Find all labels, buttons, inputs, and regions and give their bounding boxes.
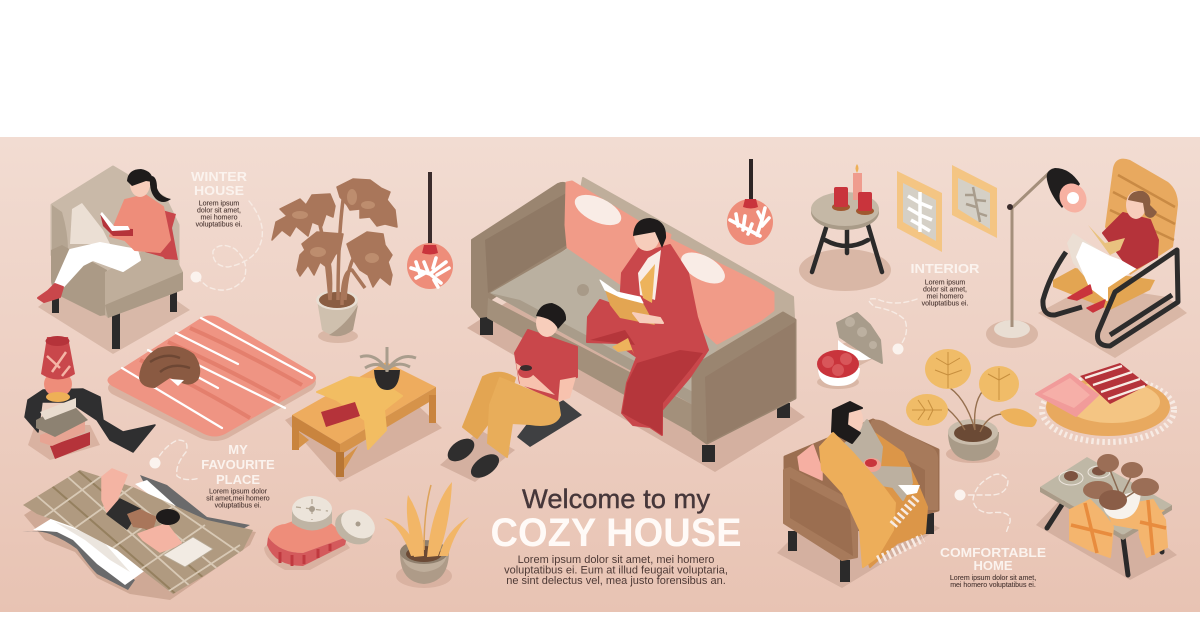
rocking chair with reading woman bbox=[1038, 159, 1187, 358]
wall frame 2 bbox=[952, 165, 997, 238]
dashed connector: winter house bbox=[190, 201, 262, 290]
golden leaf plant bbox=[906, 349, 1037, 463]
comfortable home heading: COMFORTABLE bbox=[940, 545, 1046, 560]
woman reading bbox=[38, 169, 171, 302]
comfortable home description: mei homero voluptatibus ei. bbox=[950, 582, 1036, 589]
dashed connector: my favourite place bbox=[150, 440, 200, 480]
my favourite place description: sit amet,mei homero bbox=[206, 496, 270, 502]
right arm bbox=[693, 313, 795, 443]
pendant lamp left bbox=[407, 172, 453, 289]
red book bbox=[321, 402, 360, 427]
black rocking frame bbox=[1043, 250, 1178, 346]
armchair with reading woman bbox=[38, 167, 190, 354]
round pouf 2 bbox=[329, 504, 380, 551]
coffee cups bbox=[1059, 466, 1110, 485]
poufs and cushion bbox=[264, 496, 380, 570]
dashed connector: interior bbox=[869, 299, 917, 354]
title description: ne sint delectus vel, mea justo forensibus an. bbox=[506, 575, 726, 587]
striped rug with cat bbox=[107, 316, 316, 441]
floor lamp bbox=[986, 168, 1092, 348]
orange leaf plant bbox=[384, 482, 469, 588]
woman with red blanket bbox=[587, 218, 708, 435]
my favourite place description: Lorem ipsum dolor bbox=[209, 488, 268, 496]
woman bbox=[832, 402, 920, 500]
left arm bbox=[472, 183, 570, 317]
lying woman bbox=[102, 469, 182, 552]
interior description: mei homero bbox=[927, 294, 964, 300]
dashed connector: comfortable home bbox=[954, 474, 1010, 533]
candles bbox=[832, 164, 874, 215]
small potted plant bbox=[360, 347, 416, 390]
open book bbox=[163, 537, 213, 567]
winter house heading: WINTER bbox=[191, 169, 248, 184]
comfortable home description: Lorem ipsum dolor sit amet, bbox=[950, 575, 1036, 582]
background panel bbox=[0, 137, 1200, 612]
interior description: Lorem ipsum bbox=[925, 280, 965, 286]
stool with candles bbox=[799, 164, 891, 291]
my favourite place heading: FAVOURITE bbox=[201, 457, 275, 472]
plaid blanket with lying woman bbox=[22, 465, 256, 610]
interior heading: INTERIOR bbox=[910, 261, 980, 276]
lamp bbox=[41, 336, 75, 402]
cozy house line: COZY HOUSE bbox=[490, 511, 742, 555]
yellow blanket bbox=[317, 377, 402, 449]
open book bbox=[605, 290, 655, 325]
wooden back bbox=[1105, 159, 1178, 275]
wooden seat bbox=[1053, 268, 1155, 310]
book stack bbox=[36, 398, 90, 459]
woman bbox=[1067, 191, 1158, 312]
title description: Lorem ipsum dolor sit amet, mei homero bbox=[518, 554, 714, 566]
sofa back bbox=[570, 178, 795, 390]
armchair with woman and orange blanket bbox=[777, 402, 940, 588]
winter house description: Lorem ipsum bbox=[199, 200, 239, 208]
pillow in chair bbox=[798, 445, 822, 480]
welcome line: Welcome to my bbox=[522, 484, 711, 514]
orange blanket front bbox=[820, 433, 895, 567]
plaid bbox=[23, 470, 253, 594]
cat bbox=[139, 346, 200, 388]
round rug with pillows bbox=[1036, 363, 1174, 442]
winter house heading line 2: HOUSE bbox=[194, 183, 244, 198]
pink pillow bbox=[1036, 374, 1098, 416]
comfortable home heading: HOME bbox=[974, 558, 1013, 573]
winter house description: mei homero bbox=[201, 214, 238, 222]
small plant and red flowers bbox=[817, 313, 882, 389]
side table with cups and plaid cloth bbox=[1036, 454, 1177, 580]
red flowers in white bowl bbox=[817, 350, 860, 389]
sofa with seated woman and man bbox=[440, 178, 805, 483]
wall frame 1 bbox=[897, 171, 942, 252]
my favourite place description: voluptatibus ei. bbox=[215, 502, 261, 510]
monstera plant bbox=[272, 179, 397, 343]
pillows bbox=[566, 182, 670, 290]
interior description: voluptatibus ei. bbox=[922, 300, 968, 308]
dark scarf bbox=[25, 389, 155, 452]
my favourite place heading: MY bbox=[228, 442, 248, 457]
white and grey blanket edges bbox=[140, 475, 250, 536]
title description: voluptatibus ei. Eum at illud feugait voluptaria, bbox=[504, 564, 728, 576]
round pouf 1 bbox=[292, 496, 332, 530]
striped pillow bbox=[1080, 363, 1148, 404]
man on floor with cup bbox=[440, 303, 582, 483]
seat bbox=[490, 247, 720, 405]
plaid cloth bbox=[1070, 500, 1167, 557]
white bowl with round leaves bbox=[1083, 454, 1159, 519]
interior description: dolor sit amet, bbox=[923, 286, 967, 294]
winter house description: dolor sit amet, bbox=[197, 208, 241, 214]
orange blanket back bbox=[850, 428, 927, 567]
my favourite place heading: PLACE bbox=[216, 472, 260, 487]
table lamp with books and dark scarf bbox=[25, 336, 155, 460]
winter house description: voluptatibus ei. bbox=[196, 222, 242, 228]
coffee table with blanket and plant bbox=[285, 347, 442, 482]
title bbox=[490, 484, 742, 587]
pendant lamp right bbox=[727, 159, 773, 245]
